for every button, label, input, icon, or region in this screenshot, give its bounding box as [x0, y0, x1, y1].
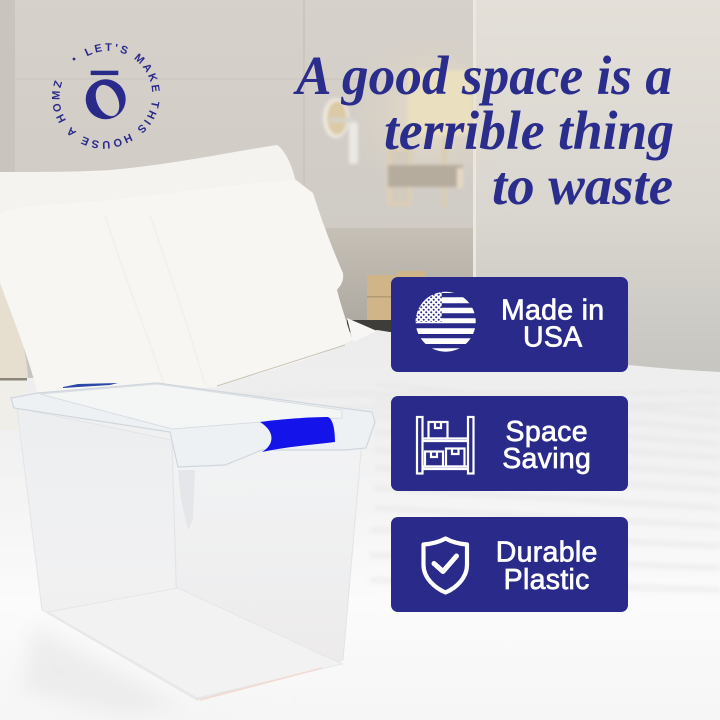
icon: shield with check	[424, 538, 467, 592]
headline: terrible thing	[384, 100, 674, 161]
left sheet fold	[0, 378, 27, 430]
pink base edge	[200, 668, 322, 700]
text: Durable Plastic: Plastic	[504, 564, 590, 596]
blue latch	[260, 417, 335, 452]
text: Space Saving: Space	[506, 416, 588, 448]
background: hotel room wall and headboard	[0, 0, 720, 400]
headline	[293, 45, 674, 216]
headline: to waste	[492, 155, 673, 216]
storage box	[11, 383, 375, 715]
back pillow	[0, 145, 300, 240]
back latch	[63, 383, 118, 388]
box left face	[17, 408, 197, 700]
icon: shelf with boxes	[417, 417, 474, 474]
box right face	[172, 440, 362, 700]
lid top	[40, 384, 342, 429]
badge: Durable Plastic	[391, 517, 628, 612]
wall lamp	[323, 70, 473, 207]
badge: Space Saving	[391, 396, 628, 491]
text: Durable Plastic: Durable	[496, 537, 598, 569]
text: Made in USA: USA	[523, 322, 582, 354]
pillow seam	[105, 215, 205, 388]
logo O counter	[91, 81, 124, 120]
text: Space Saving: Saving	[502, 443, 591, 475]
pillow shadow line	[217, 345, 345, 386]
text: Made in USA: Made in	[501, 294, 604, 326]
headline: A good space is a	[293, 45, 672, 106]
box floor	[48, 588, 342, 698]
lid	[11, 383, 375, 467]
side pillow	[347, 318, 377, 342]
logo letter O	[86, 79, 126, 119]
logo ring text: LET'S MAKE THIS HOUSE A HOMZ	[52, 43, 160, 149]
icon: US flag circle	[415, 291, 476, 352]
badge: Made in USA	[391, 277, 628, 372]
logo bar	[91, 71, 118, 75]
logo: circular badge	[52, 43, 160, 149]
pillows	[0, 145, 377, 430]
front pillow	[0, 180, 352, 393]
box shadow	[20, 625, 300, 715]
corner rib	[178, 470, 195, 530]
logo dot	[73, 58, 75, 60]
bedside socket panel and table	[347, 271, 426, 332]
bed sheet	[0, 330, 720, 720]
left crumpled cushion	[0, 283, 28, 378]
